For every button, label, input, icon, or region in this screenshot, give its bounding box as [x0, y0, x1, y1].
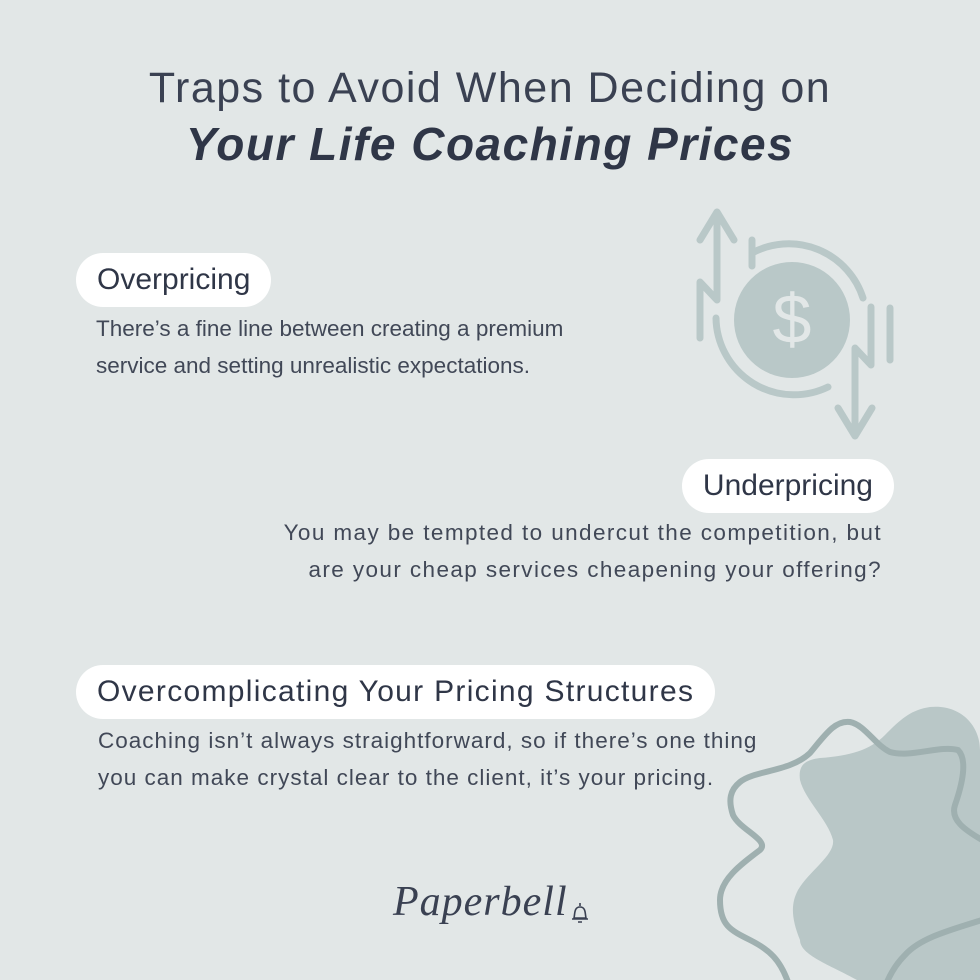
- text: underpricing description: are your cheap services cheapening your offering?: [308, 557, 882, 582]
- text: overpricing description: [96, 316, 563, 378]
- text: overcomplicating description: Coaching isn’t always straightforward, so if there’s one thing: [98, 728, 757, 753]
- heading pill: Underpricing: Underpricing: [703, 469, 873, 502]
- logo: Paperbell: Paperbell: [393, 879, 568, 925]
- section: overpricing: [76, 253, 563, 378]
- section: overcomplicating: [76, 665, 757, 790]
- icon: bell: [572, 903, 588, 923]
- text: underpricing description: [284, 520, 882, 582]
- title: Your Life Coaching Prices: [186, 118, 794, 170]
- title: [149, 64, 831, 170]
- icon: dollar with arrows: [696, 208, 894, 440]
- text: overpricing description: There’s a fine line between creating a premium: [96, 316, 563, 341]
- heading pill: Overcomplicating: [76, 665, 715, 719]
- section: underpricing: [284, 459, 894, 582]
- blob decoration: [717, 706, 980, 980]
- heading pill: Overpricing: [76, 253, 271, 307]
- heading pill: Underpricing: [682, 459, 894, 513]
- text: underpricing description: You may be tempted to undercut the competition, but: [284, 520, 882, 545]
- text: overcomplicating description: you can make crystal clear to the client, it’s your pricing.: [98, 765, 714, 790]
- heading pill: Overpricing: Overpricing: [97, 263, 250, 296]
- icon: dollar with arrows: $: [773, 280, 811, 358]
- title: Traps to Avoid When Deciding on: [149, 64, 831, 112]
- heading pill: Overcomplicating: Overcomplicating Your Pricing Structures: [97, 675, 694, 708]
- text: overcomplicating description: [98, 728, 757, 790]
- text: overpricing description: service and setting unrealistic expectations.: [96, 353, 530, 378]
